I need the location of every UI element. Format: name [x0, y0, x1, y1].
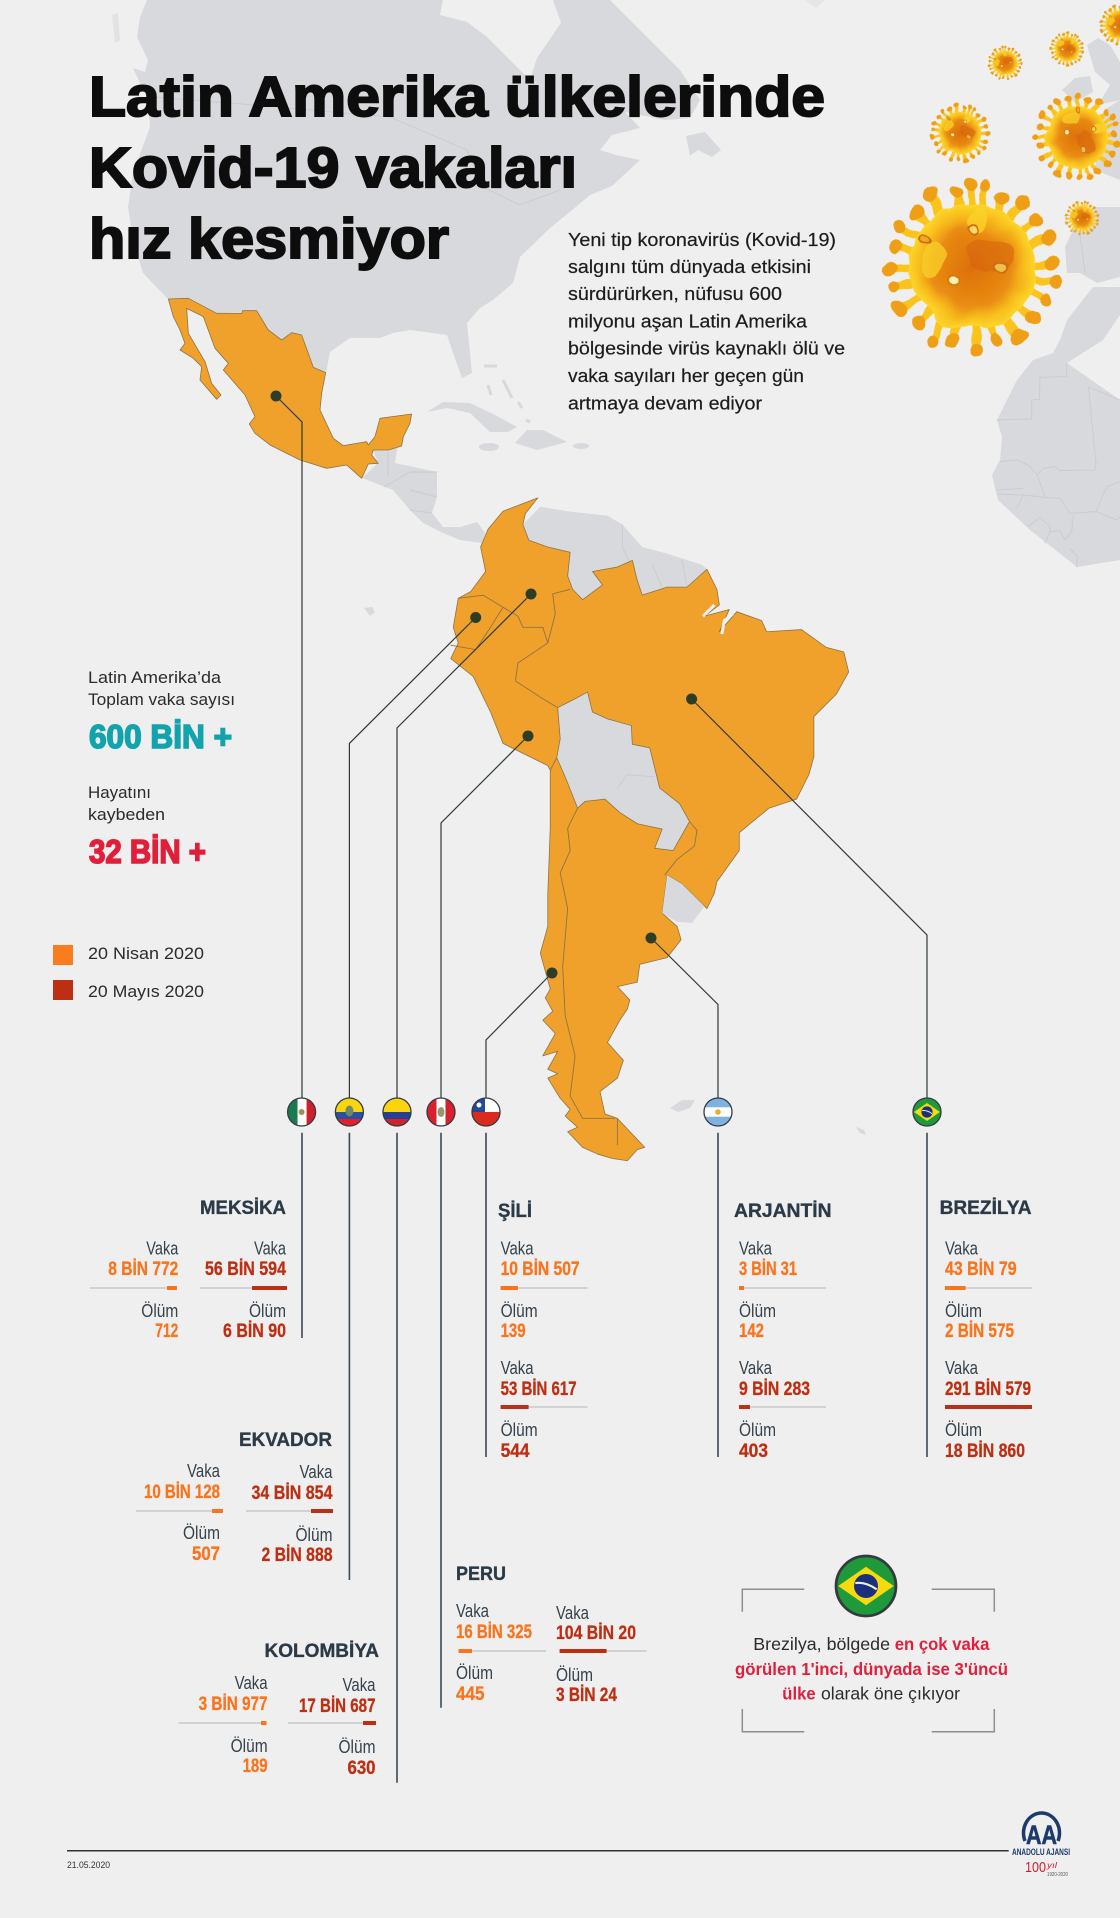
callout text: ülke	[782, 1683, 816, 1703]
intro text: Yeni tip koronavirüs (Kovid-19)	[568, 230, 836, 250]
flag: colombia	[383, 1098, 411, 1126]
title	[89, 65, 825, 271]
panel: arjantin	[718, 1133, 832, 1462]
amazon mouth	[703, 605, 733, 634]
may figures: 544	[501, 1440, 530, 1462]
panel: peru	[441, 1133, 647, 1708]
may figures: 104 BİN 20	[556, 1621, 636, 1644]
connector: argentina	[646, 932, 718, 1098]
april figures	[456, 1601, 546, 1705]
april figures: Vaka	[235, 1673, 268, 1693]
connector: brazil	[686, 694, 927, 1098]
stat: total cases	[88, 668, 235, 755]
stat: total cases: Latin Amerika’da	[88, 668, 222, 687]
north america land	[128, 0, 700, 378]
april figures: 445	[456, 1683, 485, 1705]
may figures: 6 BİN 90	[223, 1319, 286, 1342]
april figures: Ölüm	[141, 1301, 178, 1321]
may figures: 3 BİN 24	[556, 1683, 617, 1706]
jamaica	[479, 443, 499, 451]
may figures	[556, 1603, 647, 1706]
cuba	[427, 402, 517, 432]
may figures: Vaka	[254, 1239, 287, 1259]
april figures: 10 BİN 128	[144, 1480, 220, 1503]
logo: anadolu ajansi: AA	[1026, 1820, 1057, 1850]
may figures: 18 BİN 860	[945, 1439, 1025, 1462]
may figures	[739, 1358, 826, 1462]
map: mexico	[168, 298, 412, 478]
map: south america	[451, 498, 849, 1161]
logo: anadolu ajansi: yıl	[1046, 1861, 1057, 1870]
heading: EKVADOR	[239, 1429, 332, 1451]
may figures: 34 BİN 854	[252, 1481, 333, 1504]
icon: brazil flag	[836, 1556, 896, 1616]
april figures: 43 BİN 79	[945, 1257, 1017, 1280]
panel: meksika	[90, 1133, 302, 1342]
connector: ecuador	[349, 612, 481, 1098]
stat: total deaths: 32 BİN +	[89, 833, 206, 870]
callout text: olarak öne çıkıyor	[821, 1683, 960, 1703]
callout text: Brezilya, bölgede	[753, 1634, 890, 1654]
may figures: 403	[739, 1440, 768, 1462]
may figures	[501, 1358, 588, 1462]
bolivia and paraguay	[557, 692, 690, 851]
april figures: 8 BİN 772	[108, 1257, 178, 1280]
intro text	[568, 230, 845, 413]
may figures: Vaka	[342, 1675, 376, 1695]
april figures: 3 BİN 31	[739, 1257, 797, 1280]
callout text: görülen 1'inci, dünyada ise 3'üncü	[735, 1659, 1008, 1679]
may figures: Vaka	[300, 1462, 333, 1482]
intro text: sürdürürken, nüfusu 600	[568, 284, 782, 304]
flag: brazil	[913, 1098, 941, 1126]
april figures	[501, 1239, 588, 1342]
logo: anadolu ajansi: ANADOLU AJANSI	[1012, 1847, 1070, 1857]
flag: argentina	[704, 1098, 732, 1126]
africa	[992, 287, 1120, 567]
britain and ireland	[1062, 76, 1093, 102]
may figures: Ölüm	[739, 1420, 776, 1440]
may figures: Ölüm	[556, 1665, 593, 1685]
legend	[53, 944, 204, 1001]
heading: BREZİLYA	[940, 1196, 1032, 1219]
country borders	[451, 589, 697, 1145]
april figures: 189	[243, 1755, 268, 1777]
heading: MEKSİKA	[200, 1196, 286, 1219]
panel: kolombiya	[179, 1133, 397, 1783]
april figures: 142	[739, 1320, 764, 1342]
may figures	[246, 1462, 333, 1566]
connector: colombia	[397, 588, 536, 1098]
title: Kovid-19 vakaları	[89, 136, 577, 200]
may figures: 53 BİN 617	[501, 1377, 577, 1400]
may figures: 630	[348, 1757, 376, 1779]
central america	[362, 443, 485, 543]
stat: total cases: 600 BİN +	[89, 718, 232, 755]
heading: KOLOMBİYA	[264, 1639, 379, 1662]
panel: brezilya	[927, 1133, 1032, 1462]
april figures: Vaka	[456, 1601, 490, 1621]
may figures: Ölüm	[338, 1737, 376, 1757]
april figures	[945, 1239, 1032, 1342]
heading: ŞİLİ	[498, 1199, 532, 1222]
connector: peru	[441, 730, 534, 1098]
logo: anadolu ajansi: 1920-2020	[1047, 1872, 1068, 1878]
may figures: Vaka	[945, 1358, 979, 1378]
covered countries	[451, 498, 849, 1161]
title: Latin Amerika ülkelerinde	[89, 65, 825, 129]
connector: mexico	[270, 390, 302, 1098]
april figures: Vaka	[739, 1239, 773, 1259]
april figures: 3 BİN 977	[199, 1692, 268, 1715]
venezuela and guianas land	[523, 507, 707, 600]
april figures: Ölüm	[739, 1301, 776, 1321]
flag: peru	[427, 1098, 455, 1126]
may figures: 2 BİN 888	[262, 1543, 333, 1566]
april figures: Vaka	[146, 1239, 179, 1259]
panel: ekvador	[136, 1133, 349, 1580]
may figures: Ölüm	[945, 1420, 982, 1440]
legend: 20 Nisan 2020	[88, 944, 204, 963]
heading: ARJANTİN	[734, 1199, 832, 1222]
puerto rico	[573, 443, 589, 449]
uruguay	[662, 875, 704, 923]
may figures: 291 BİN 579	[945, 1377, 1031, 1400]
may figures: 9 BİN 283	[739, 1377, 810, 1400]
may figures: Ölüm	[296, 1525, 332, 1545]
small southern islands	[364, 607, 866, 1135]
may figures: Vaka	[739, 1358, 773, 1378]
may figures: Ölüm	[501, 1420, 538, 1440]
april figures: Ölüm	[945, 1301, 982, 1321]
heading: PERU	[456, 1563, 506, 1585]
intro text: salgını tüm dünyada etkisini	[568, 257, 811, 277]
stat: total cases: Toplam vaka sayısı	[88, 690, 235, 709]
hispaniola	[515, 430, 567, 450]
title: hız kesmiyor	[89, 207, 449, 271]
may figures: Vaka	[556, 1603, 590, 1623]
world map: grey landmasses	[112, 0, 1120, 1135]
april figures	[90, 1239, 179, 1342]
coronavirus illustrations	[868, 0, 1120, 371]
may figures: Ölüm	[249, 1301, 286, 1321]
stat: total deaths: kaybeden	[88, 805, 165, 824]
april figures: Ölüm	[501, 1301, 538, 1321]
canada-us border	[153, 97, 560, 205]
iberia	[1065, 207, 1120, 283]
may figures	[200, 1239, 287, 1342]
callout: brazil	[735, 1556, 1008, 1732]
flag: chile	[472, 1098, 500, 1126]
footer rule	[67, 1850, 1009, 1852]
april figures: Vaka	[945, 1239, 979, 1259]
intro text: artmaya devam ediyor	[568, 393, 762, 413]
april figures	[136, 1461, 223, 1565]
april figures: 10 BİN 507	[501, 1257, 580, 1280]
april figures: 507	[192, 1543, 220, 1565]
connector: chile	[486, 968, 558, 1098]
callout text	[735, 1634, 1008, 1703]
april figures: Ölüm	[456, 1663, 493, 1683]
may figures	[945, 1358, 1032, 1462]
intro text: bölgesinde virüs kaynaklı ölü ve	[568, 339, 845, 359]
flag: ecuador	[335, 1098, 363, 1126]
intro text: vaka sayıları her geçen gün	[568, 366, 804, 386]
april figures: 16 BİN 325	[456, 1620, 532, 1643]
april figures: Ölüm	[183, 1523, 220, 1543]
panel: şili	[486, 1133, 588, 1462]
april figures: Ölüm	[231, 1736, 268, 1756]
april figures: 712	[155, 1320, 178, 1342]
may figures: Vaka	[501, 1358, 534, 1378]
april figures: Vaka	[501, 1239, 534, 1259]
callout text: en çok vaka	[895, 1634, 990, 1654]
april figures: Vaka	[187, 1461, 221, 1481]
april figures	[179, 1673, 268, 1777]
stat: total deaths: Hayatını	[88, 783, 151, 802]
april figures	[739, 1239, 826, 1342]
logo: anadolu ajansi	[1012, 1813, 1070, 1878]
stat: total deaths	[88, 783, 206, 870]
intro text: milyonu aşan Latin Amerika	[568, 312, 808, 332]
may figures: 56 BİN 594	[205, 1257, 286, 1280]
date: 21.05.2020	[67, 1860, 110, 1871]
legend: 20 Mayıs 2020	[88, 982, 204, 1001]
april figures: 139	[501, 1320, 526, 1342]
flag: mexico	[288, 1098, 316, 1126]
bahamas	[484, 366, 530, 422]
logo: anadolu ajansi: 100	[1025, 1859, 1046, 1876]
april figures: 2 BİN 575	[945, 1319, 1014, 1342]
may figures: 17 BİN 687	[299, 1694, 376, 1717]
may figures	[288, 1675, 376, 1779]
